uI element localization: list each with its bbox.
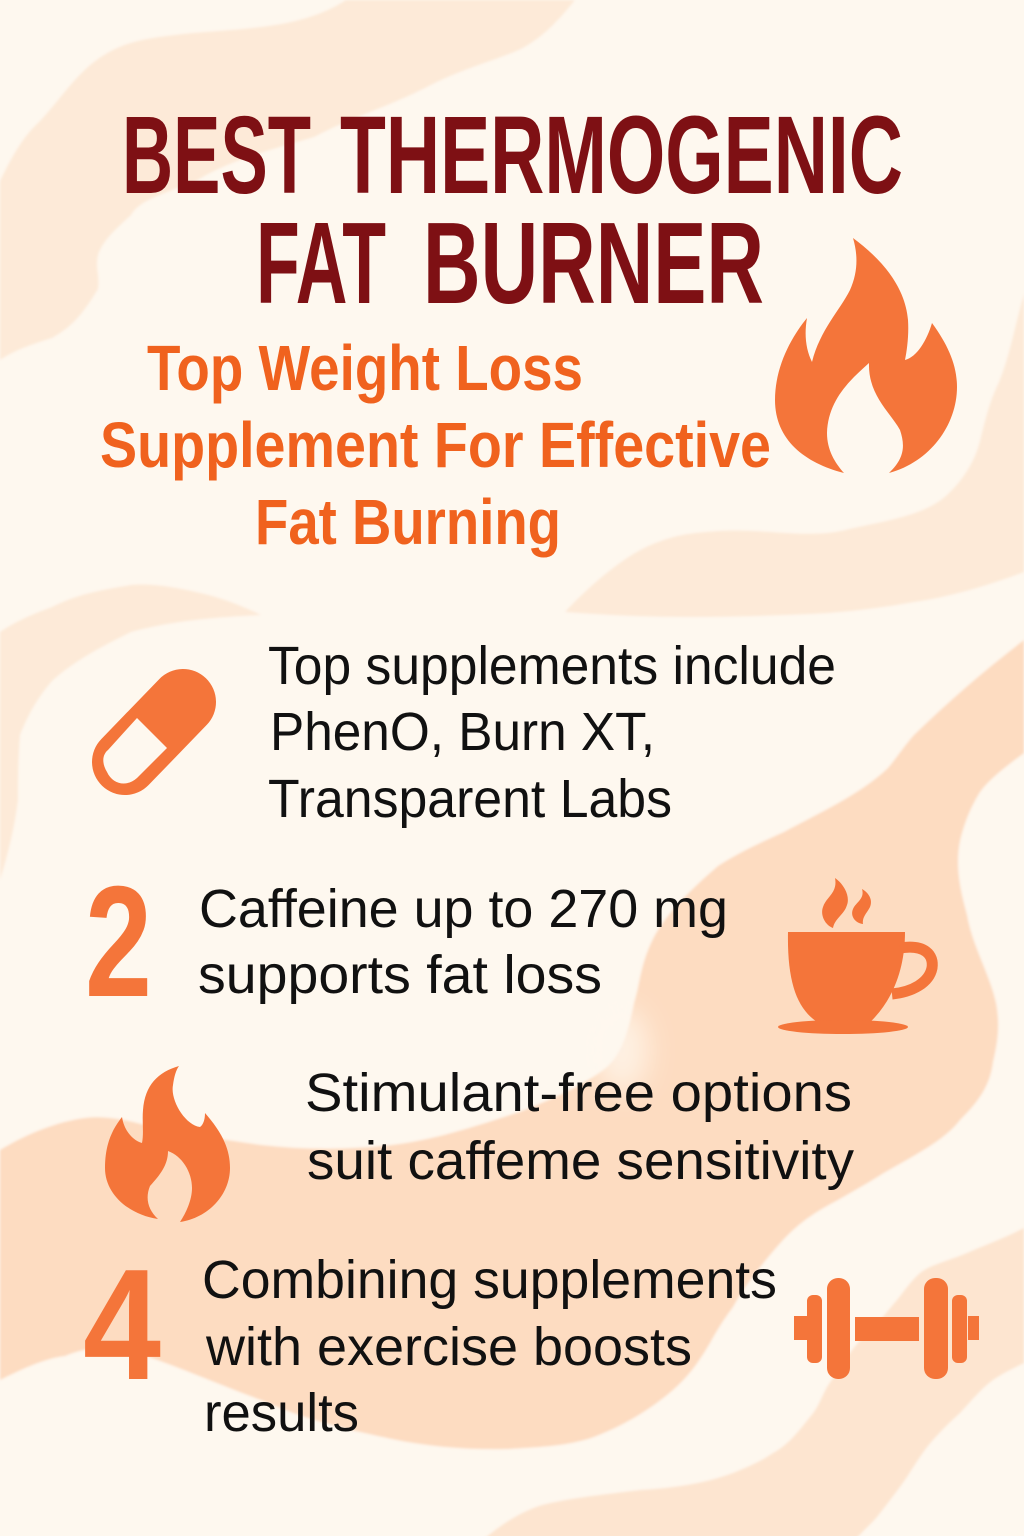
subtitle: Supplement For Effective [100, 409, 771, 481]
text: combining [202, 1250, 777, 1443]
text: top supplements [268, 636, 836, 829]
text: stimulant-free [305, 1063, 854, 1191]
title: FAT [256, 198, 386, 328]
text: stimulant-free: Stimulant-free options [305, 1063, 852, 1123]
icon: coffee cup [778, 878, 932, 1034]
title: BURNER [423, 198, 764, 328]
text: top supplements: Transparent Labs [268, 769, 672, 829]
text: caffeine [198, 879, 728, 1005]
text: top supplements: Top supplements include [268, 636, 836, 696]
title [122, 94, 903, 328]
text: caffeine: Caffeine up to 270 mg [199, 879, 728, 939]
icon: capsule [103, 702, 183, 784]
number 4: 4 [83, 1237, 161, 1413]
icon: large flame [775, 238, 957, 473]
title: BEST [122, 94, 311, 217]
text: top supplements: PhenO, Burn XT, [270, 702, 655, 762]
icon: dumbbell [794, 1278, 979, 1379]
icon: small flame [105, 1066, 230, 1222]
text: combining: with exercise boosts [205, 1317, 692, 1377]
subtitle [100, 332, 771, 558]
subtitle: Fat Burning [255, 486, 561, 558]
text: caffeine: supports fat loss [198, 945, 602, 1005]
subtitle: Top Weight Loss [147, 332, 583, 404]
text: stimulant-free: suit caffeme sensitivity [307, 1131, 854, 1191]
text: combining: results [204, 1383, 359, 1443]
number 2: 2 [85, 854, 152, 1030]
text: combining: Combining supplements [202, 1250, 777, 1310]
